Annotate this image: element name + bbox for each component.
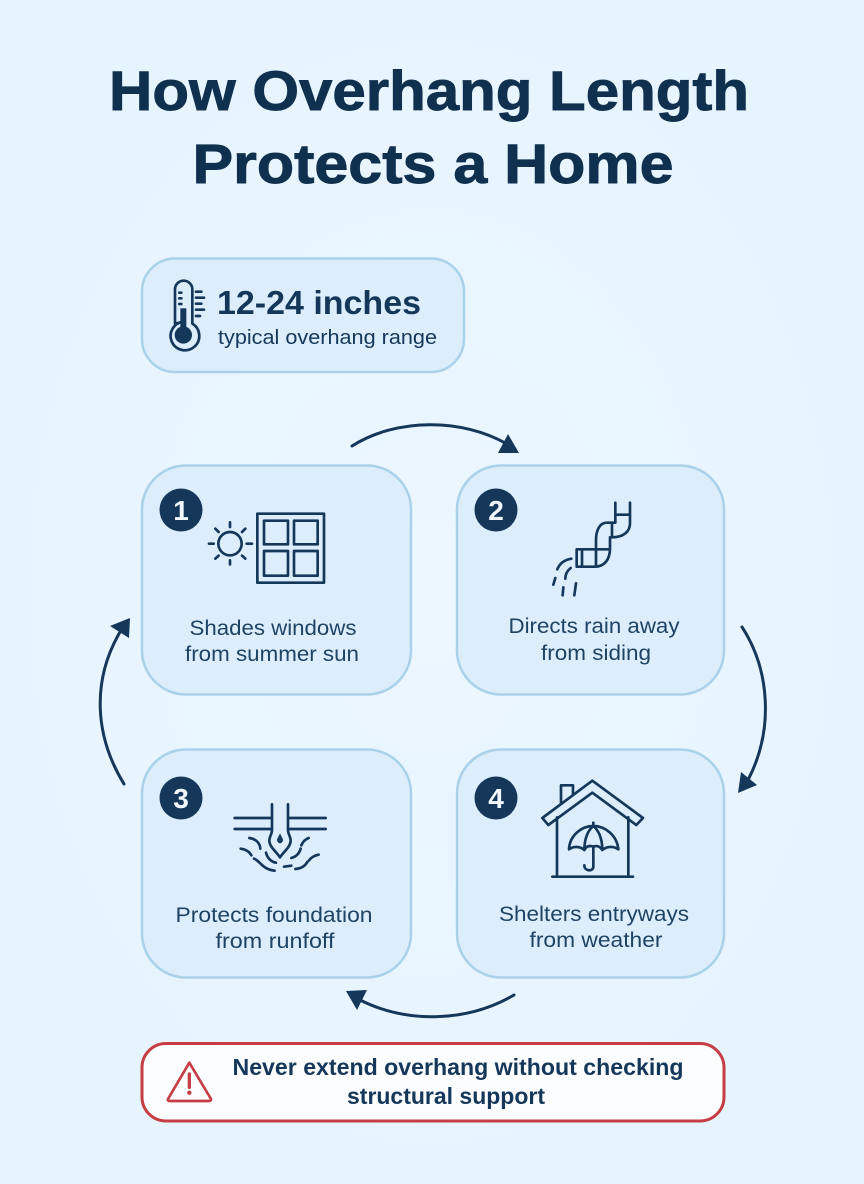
warning text: Never extend overhang without checking: [232, 1054, 684, 1080]
badge 4: 4: [488, 783, 504, 814]
title: [109, 59, 749, 195]
badge 2: 2: [488, 495, 504, 526]
badge 1: [160, 488, 202, 532]
stat value: 12-24 inches: [217, 284, 421, 321]
caption: Shelters entryways: [499, 903, 689, 926]
panel: step 2 directs rain: from siding: [541, 642, 651, 665]
badge 3: 3: [173, 783, 189, 814]
panel: step 2 directs rain: [457, 466, 724, 694]
badge 2: [474, 488, 518, 532]
title: How Overhang Length: [109, 59, 749, 122]
icon: sun and window: [209, 514, 324, 583]
panel: step 1 shades windows: from summer sun: [185, 643, 359, 666]
panel: typical overhang range: [142, 258, 464, 372]
callout: structural warning: structural support: [347, 1083, 545, 1109]
panel: step 4 shelters entryways: [457, 750, 724, 978]
caption: Shades windows: [190, 617, 356, 640]
panel: step 1 shades windows: [142, 466, 411, 694]
arrow: right, step 2 to step 4: [738, 627, 765, 793]
badge 1: 1: [173, 495, 189, 526]
icon: thermometer: [171, 281, 204, 350]
arrow: bottom, step 4 to step 3: [346, 990, 514, 1017]
badge 3: [160, 776, 202, 820]
panel: step 3 protects foundation: [142, 750, 411, 978]
panel: step 3 protects foundation: from runfoff: [216, 930, 335, 953]
icon: foundation drain: [235, 804, 326, 871]
arrow: top, step 1 to step 2: [352, 425, 519, 453]
caption: Directs rain away: [508, 615, 680, 638]
icon: downspout with water: [553, 503, 630, 595]
stat label: typical overhang range: [218, 326, 437, 349]
badge 4: [474, 776, 518, 820]
caption: Protects foundation: [176, 904, 372, 927]
icon: house with umbrella: [542, 781, 643, 877]
panel: step 4 shelters entryways: from weather: [530, 929, 663, 952]
callout: structural warning: [142, 1044, 724, 1121]
title: Protects a Home: [192, 132, 674, 195]
arrow: left, step 3 to step 1: [100, 618, 130, 784]
icon: warning triangle: [168, 1063, 211, 1101]
